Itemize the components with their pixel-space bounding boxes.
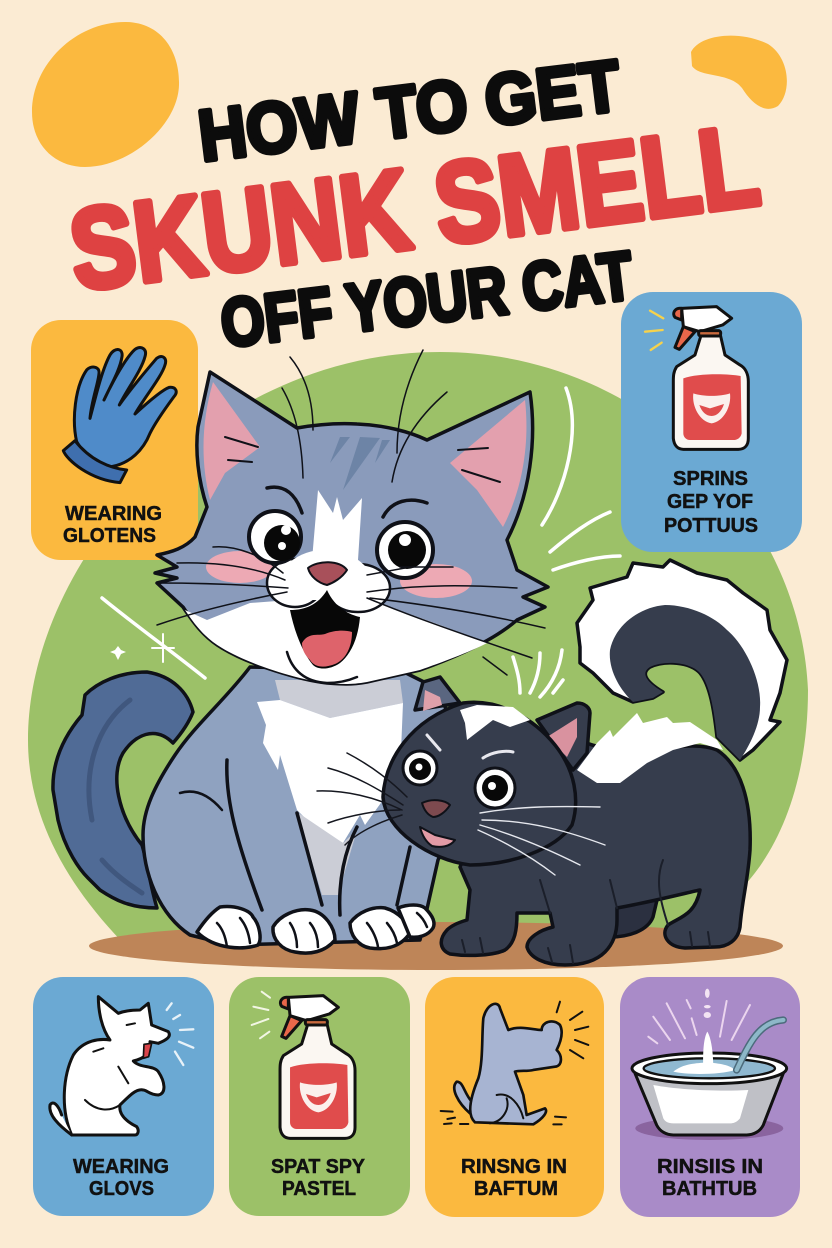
cat left ear inner [204,382,260,500]
skunk leg and toe lines [462,860,710,963]
cat open mouth [290,590,360,669]
cat paws [197,905,434,953]
skunk tail white [577,560,787,760]
skunk body [441,730,750,965]
skunk nose [422,800,450,817]
panel: bathtub card: BATHTUB [662,1178,757,1200]
cat whiskers [157,350,545,675]
panel: spray card bottom [229,977,410,1216]
skunk far leg [610,900,657,937]
icon: blue glove [63,348,176,483]
skunk mouth [420,827,455,847]
cat leg lines [180,760,410,915]
skunk left ear [415,677,460,710]
illustration: grey cat [53,350,548,953]
card caption: SPAT SPY [271,1156,366,1178]
cat right ear inner [450,400,526,527]
white lower face [185,590,487,684]
card caption: RINSNG IN [461,1156,567,1178]
cat body [143,667,470,945]
ground shadow [89,922,783,970]
cheek blush [206,551,274,583]
cat chest fur [257,700,403,843]
skunk eyes [403,735,515,808]
skunk right ear [537,703,590,770]
cat tail shading [89,700,142,893]
skunk head stripe [460,705,530,740]
cat tail [53,672,193,908]
green background shape [28,352,808,950]
whisker pads [267,550,390,612]
panel: wearing gloves card [33,977,214,1216]
cat nose [308,562,347,585]
title line 3: OFF YOUR CAT [217,237,637,362]
white blaze [312,490,362,560]
skunk tail dark core [610,605,760,760]
title [63,46,766,362]
cat chin line [287,652,357,683]
title line 1: HOW TO GET [194,46,625,177]
ear fur ticks [225,437,500,482]
panel: spray card: GEP YOF [667,491,753,513]
panel: spray card bottom: PASTEL [282,1178,356,1200]
panel: spray card: POTTUUS [664,515,758,537]
cat tongue [302,631,352,667]
skunk head [383,702,576,865]
panel: bathtub card [620,977,800,1217]
icon: wash basin [632,989,787,1140]
motion lines [102,388,620,697]
card caption: SPRINS [673,468,748,490]
illustration: skunk [317,560,787,965]
forehead stripes [330,437,390,490]
card caption: WEARING [65,503,162,525]
panel: rinsing card: BAFTUM [474,1178,558,1200]
panel: wearing gloves card: GLOVS [89,1178,154,1200]
skunk whiskers [478,807,605,875]
icon: white cat coughing [50,997,193,1135]
panel: glove card: GLOTENS [63,525,156,547]
icon: spray bottle [252,992,355,1138]
cat lower chest [297,812,357,895]
icon: spray bottle [645,307,748,449]
panel: glove card [31,320,198,560]
card caption: WEARING [73,1156,169,1178]
cat neck collar fur [275,680,403,718]
panel: spray card [621,292,802,552]
cat eyes [249,487,433,578]
panel: rinsing card [425,977,604,1217]
skunk back stripe [577,713,723,783]
card caption: RINSIIS IN [657,1156,763,1178]
icon: grey cat pawing [441,1002,588,1124]
cat head [155,372,548,684]
yellow blob top left [32,22,179,167]
yellow blob top right [691,36,787,109]
cat whiskers over chest [317,753,407,845]
